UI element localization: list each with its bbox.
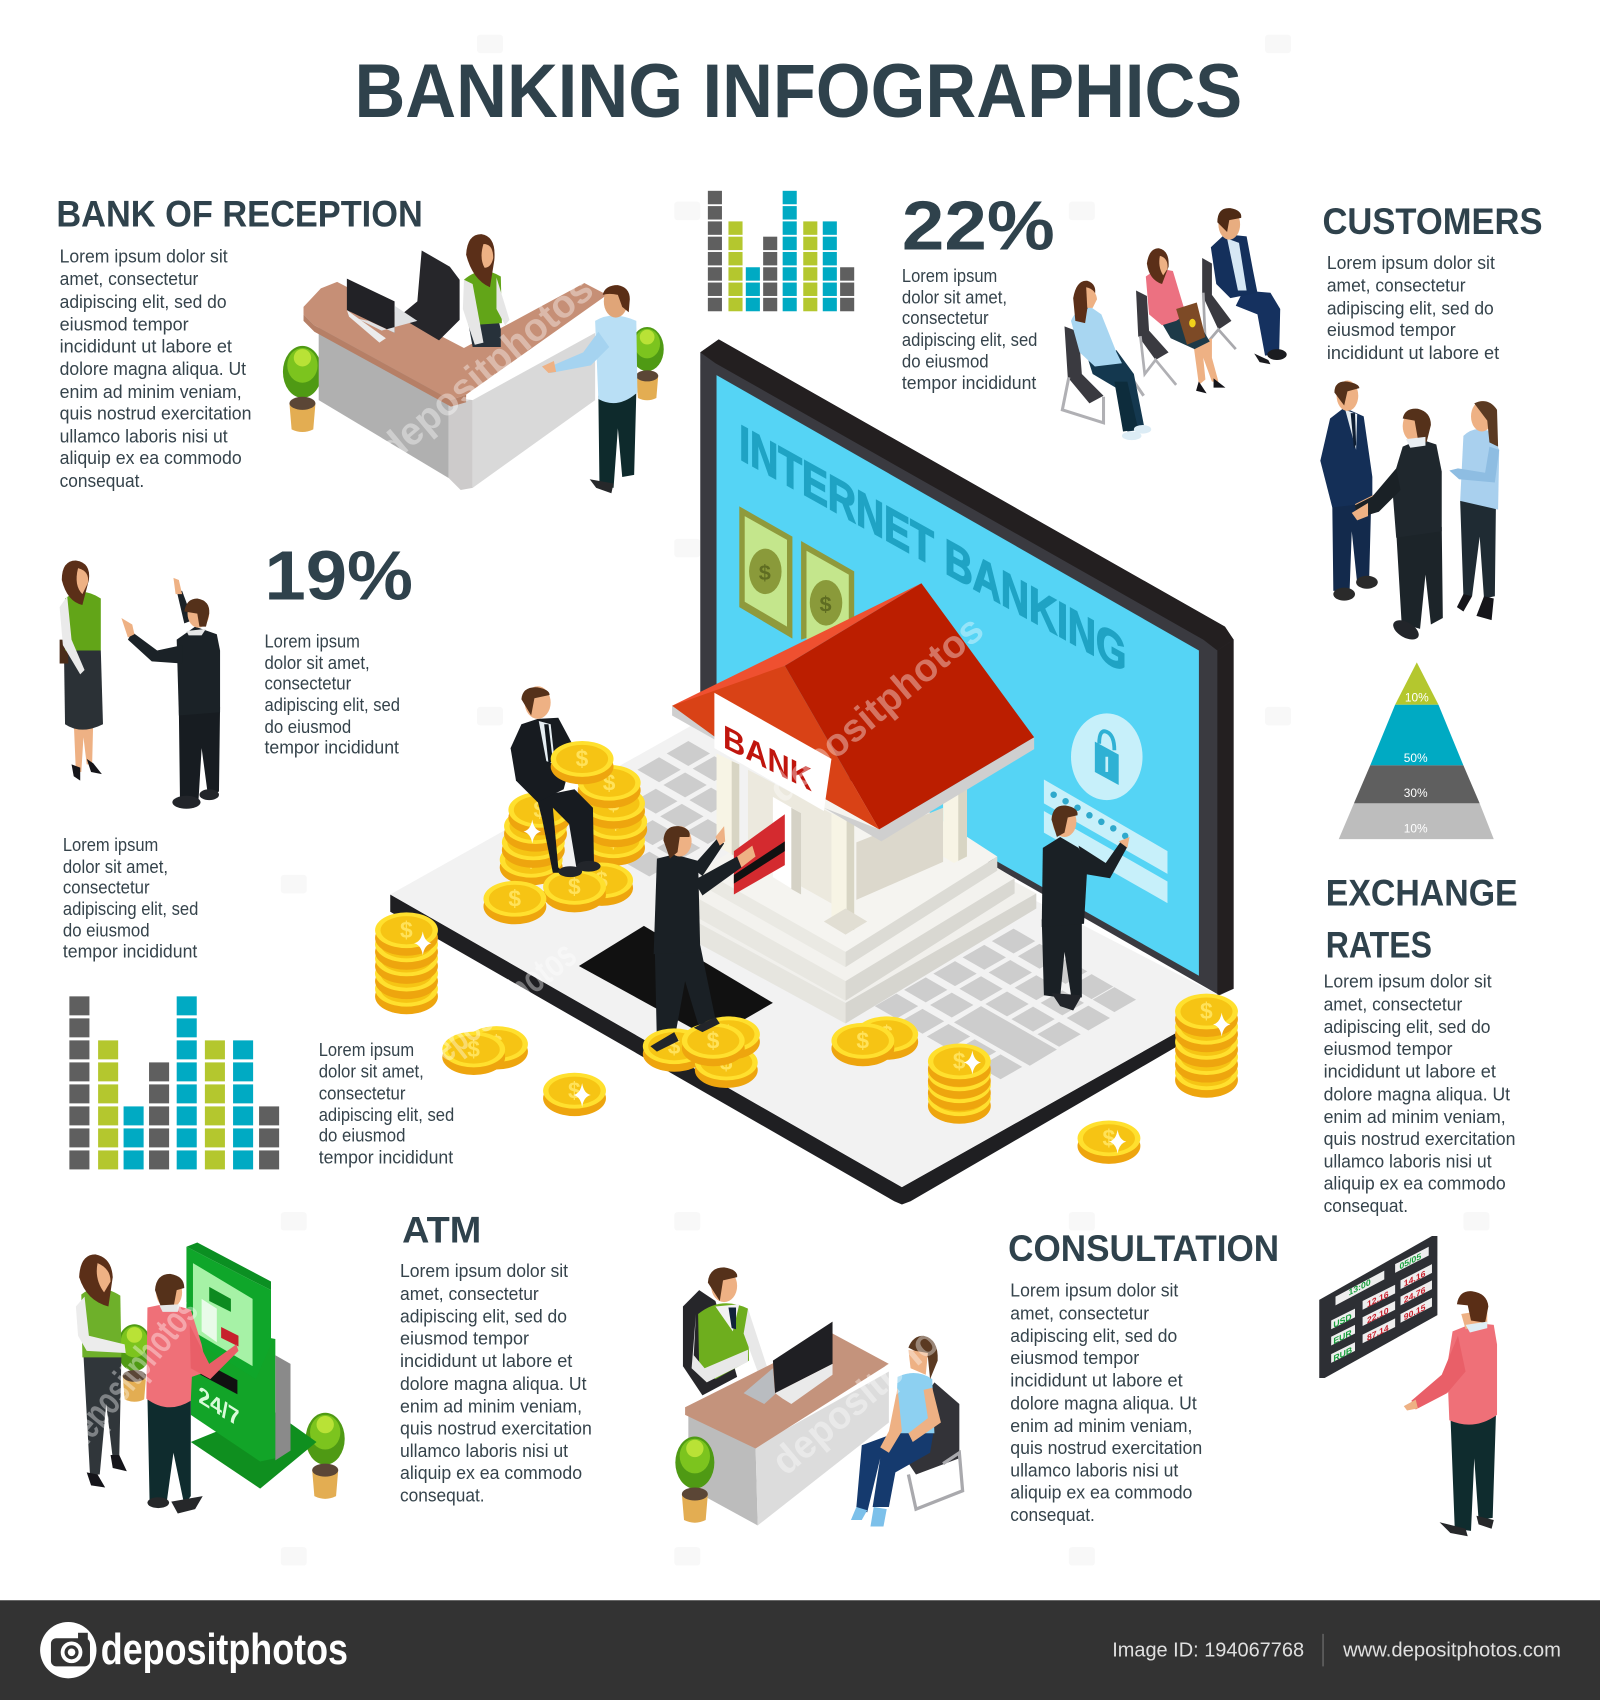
text block: consultation: Lorem ipsum dolor sit [1010, 1280, 1178, 1301]
woman clerk [60, 561, 103, 781]
text block: 22 percent: Lorem ipsum [902, 265, 997, 286]
pyramid labels: 30% [1404, 786, 1428, 800]
man at screen [1042, 805, 1130, 1010]
text block: consultation: ullamco laboris nisi ut [1010, 1460, 1178, 1481]
board cells and labels: 87.14 [1367, 1322, 1389, 1343]
banknote: $ [820, 591, 832, 616]
panel: customers [1322, 201, 1543, 363]
segment 10 percent bottom [1339, 803, 1494, 839]
exchange board [1319, 1236, 1437, 1378]
icon: consultation plant [675, 1437, 714, 1523]
text block: reception: adipiscing elit, sed do [60, 291, 227, 312]
seated man [1202, 208, 1287, 364]
text block: consultation [1010, 1280, 1202, 1525]
text block: ATM: dolore magna aliqua. Ut [400, 1373, 586, 1394]
desk monitor [773, 1322, 833, 1393]
text block: customers: incididunt ut labore et [1327, 342, 1499, 363]
heading: rates: RATES [1326, 924, 1432, 965]
icon: left plant [283, 346, 322, 432]
segment 50 percent [1370, 705, 1463, 765]
coin: single [543, 1073, 606, 1116]
logo wordmark: depositphotos [101, 1626, 348, 1674]
heading: ATM: ATM [402, 1209, 481, 1250]
text block: bottom left chart: consectetur [319, 1082, 405, 1103]
text block: 19 percent [264, 630, 400, 758]
panel: bank of reception [56, 194, 664, 493]
man in black gesturing [121, 578, 220, 809]
pyramid labels [1404, 690, 1429, 836]
text block: 19 percent: tempor incididunt [264, 737, 399, 758]
text block: exchange rates: quis nostrud exercitation [1324, 1128, 1515, 1149]
pyramid labels: 10% [1404, 822, 1428, 836]
ATM machine [186, 1242, 317, 1489]
handshake group [1320, 381, 1499, 644]
text block: 22 percent [902, 265, 1037, 393]
heading: consultation: CONSULTATION [1008, 1228, 1279, 1269]
text block: bottom left chart: adipiscing elit, sed [319, 1104, 454, 1125]
walls [856, 808, 943, 900]
logo icon [40, 1622, 96, 1678]
text block: ATM: aliquip ex ea commodo [400, 1462, 582, 1483]
text block: reception: ullamco laboris nisi ut [60, 425, 228, 446]
receptionist woman [463, 234, 509, 347]
text block: reception: dolore magna aliqua. Ut [60, 358, 246, 379]
heading: bank of reception: BANK OF RECEPTION [56, 194, 423, 235]
watermarks: depositphotos [764, 1283, 991, 1484]
text block: left middle: Lorem ipsum [63, 834, 158, 855]
reception desk [304, 234, 607, 490]
label: 24/7: 24/7 [198, 1380, 240, 1433]
text block: bottom left chart: do eiusmod [319, 1125, 405, 1146]
stat: 22 percent [902, 186, 1055, 393]
text block: ATM [400, 1260, 592, 1506]
text block: bottom left chart [319, 1039, 454, 1167]
text block: reception: quis nostrud exercitation [60, 403, 251, 424]
board cells and labels: 05/05 [1399, 1251, 1421, 1271]
door [773, 797, 801, 894]
icon: ATM plant front [306, 1413, 345, 1499]
keyboard: left section [628, 741, 736, 877]
text block: 22 percent: consectetur [902, 307, 989, 328]
text block: customers: amet, consectetur [1327, 275, 1466, 296]
watermarks [55, 267, 992, 1484]
steps [672, 772, 1036, 1023]
panel: exchange rates [1319, 872, 1518, 1536]
coins: loose pair [442, 1026, 528, 1075]
seated woman with bag [1136, 248, 1224, 392]
number: 19%: 19% [264, 537, 413, 615]
board cells and labels: USD [1333, 1311, 1352, 1330]
seated woman in blue [1062, 281, 1151, 440]
text block: consultation: consequat. [1010, 1504, 1095, 1525]
coin: single right [1078, 1121, 1140, 1164]
text block: ATM: Lorem ipsum dolor sit [400, 1260, 568, 1281]
text block: left middle [63, 834, 198, 961]
coin stack: right [1175, 994, 1238, 1098]
text block: left middle: dolor sit amet, [63, 856, 168, 877]
bank sign: BANK [723, 719, 812, 799]
icon: right plant [631, 327, 664, 400]
pyramid chart [1339, 662, 1494, 839]
segment 30 percent [1354, 765, 1480, 803]
board cells and labels: EUR [1333, 1328, 1352, 1346]
panel: consultation [675, 1228, 1279, 1527]
text block: consultation: dolore magna aliqua. Ut [1010, 1392, 1197, 1413]
watermarks: depositphotos [761, 608, 992, 811]
text block: left middle: tempor incididunt [63, 940, 197, 961]
text block: 19 percent: adipiscing elit, sed [264, 694, 400, 715]
text block: bottom left chart: dolor sit amet, [319, 1061, 424, 1082]
text block: reception: enim ad minim veniam, [60, 381, 242, 402]
board cells and labels [1331, 1247, 1432, 1364]
panel: ATM [76, 1209, 592, 1514]
text block: exchange rates: ullamco laboris nisi ut [1324, 1151, 1492, 1172]
trackpad hole [579, 926, 773, 1039]
coins: seated man stacks [483, 765, 647, 924]
ATM woman [76, 1254, 127, 1488]
text block: ATM: adipiscing elit, sed do [400, 1306, 567, 1327]
board cells and labels: 12.16 [1367, 1289, 1389, 1309]
ATM man in pink [146, 1274, 238, 1514]
title: BANKING INFOGRAPHICS [354, 49, 1242, 134]
columns [717, 754, 967, 935]
keyboard: right section [875, 929, 1136, 1079]
bank building [672, 583, 1036, 1023]
board cells and labels: 14.16 [1404, 1269, 1425, 1289]
woman in blue top [1449, 401, 1499, 620]
text block: reception [60, 245, 251, 491]
text block: exchange rates: adipiscing elit, sed do [1324, 1016, 1491, 1037]
board cells and labels: 22.10 [1367, 1305, 1389, 1326]
icon: ATM plant back [117, 1324, 152, 1402]
text block: ATM: enim ad minim veniam, [400, 1396, 582, 1417]
text block: ATM: consequat. [400, 1485, 485, 1506]
coins: pair [831, 1016, 918, 1066]
coin held by seated man [551, 741, 614, 784]
text block: left middle: do eiusmod [63, 920, 150, 941]
background camera marks [281, 35, 1489, 1566]
banknote: $ [759, 560, 771, 585]
text block: 19 percent: consectetur [264, 673, 351, 694]
text block: left middle: consectetur [63, 876, 150, 897]
coin stack: left [375, 912, 438, 1014]
black suit man [1352, 409, 1443, 644]
banknote [739, 506, 792, 639]
pyramid labels: 10% [1405, 690, 1429, 704]
text block: consultation: eiusmod tempor [1010, 1347, 1139, 1368]
text block: bottom left chart: Lorem ipsum [319, 1039, 414, 1060]
stat: 19 percent [264, 537, 413, 758]
text block: 22 percent: do eiusmod [902, 351, 989, 372]
segment 10 percent top [1395, 662, 1438, 705]
text block: exchange rates: Lorem ipsum dolor sit [1324, 971, 1492, 992]
footer bar [0, 1600, 1600, 1700]
shoes of man with card [650, 1017, 720, 1052]
icon: lock [1071, 713, 1143, 800]
monitor [347, 279, 395, 333]
board cells and labels: 24.76 [1404, 1285, 1425, 1305]
text block: reception: Lorem ipsum dolor sit [60, 245, 228, 266]
heading: customers: CUSTOMERS [1322, 201, 1543, 242]
text block: exchange rates: consequat. [1324, 1195, 1408, 1216]
consultant with chair [683, 1267, 767, 1395]
screen title: INTERNET BANKING [739, 415, 1126, 685]
text block: consultation: quis nostrud exercitation [1010, 1437, 1202, 1458]
pyramid labels: 50% [1404, 751, 1428, 765]
man with credit card [654, 814, 785, 1043]
watermarks: depositphotos [371, 267, 602, 471]
text block: ATM: incididunt ut labore et [400, 1350, 572, 1371]
banknote [801, 541, 854, 640]
number: 22%: 22% [902, 186, 1055, 264]
heading: exchange: EXCHANGE [1326, 872, 1518, 913]
password fields [1044, 780, 1167, 903]
text block: customers: adipiscing elit, sed do [1327, 297, 1494, 318]
text block: exchange rates: enim ad minim veniam, [1324, 1106, 1506, 1127]
text block: customers: eiusmod tempor [1327, 319, 1456, 340]
desk keyboard [744, 1368, 775, 1404]
board cells and labels: 90.15 [1404, 1302, 1425, 1322]
website: www.depositphotos.com [1342, 1639, 1561, 1662]
text block: 22 percent: dolor sit amet, [902, 287, 1007, 308]
coins: under man with card [643, 1016, 760, 1088]
text block: exchange rates: eiusmod tempor [1324, 1038, 1453, 1059]
reception customer man [542, 285, 637, 493]
text block: exchange rates: incididunt ut labore et [1324, 1061, 1496, 1082]
text block: reception: incididunt ut labore et [60, 335, 232, 356]
watermarks: depositphotos [413, 933, 584, 1080]
text block: consultation: enim ad minim veniam, [1010, 1415, 1192, 1436]
man in pink looking at board [1404, 1291, 1497, 1536]
consultation desk [685, 1322, 889, 1525]
bar chart: top [708, 191, 854, 311]
coin stack: middle [928, 1044, 991, 1124]
central laptop illustration [375, 339, 1238, 1205]
board cells and labels: 13:00 [1349, 1277, 1371, 1297]
text block: left middle: adipiscing elit, sed [63, 898, 198, 919]
text block: ATM: quis nostrud exercitation [400, 1417, 592, 1438]
bank sign [714, 693, 831, 811]
text block: consultation: incididunt ut labore et [1010, 1370, 1183, 1391]
seated customers [1062, 208, 1287, 440]
text block: ATM: eiusmod tempor [400, 1327, 529, 1348]
text block: reception: consequat. [60, 470, 144, 491]
text block: consultation: aliquip ex ea commodo [1010, 1481, 1192, 1502]
receptionist chair [399, 250, 460, 340]
text block: consultation: amet, consectetur [1010, 1302, 1149, 1323]
text block: 22 percent: adipiscing elit, sed [902, 329, 1037, 350]
text block: 19 percent: Lorem ipsum [264, 630, 360, 651]
text block: 22 percent: tempor incididunt [902, 372, 1036, 393]
navy suit man [1320, 381, 1378, 601]
text block: 19 percent: do eiusmod [264, 716, 351, 737]
watermarks: depositphotos [55, 1290, 207, 1459]
text block: reception: aliquip ex ea commodo [60, 447, 242, 468]
text block: reception: amet, consectetur [60, 268, 198, 289]
man sitting on coins [511, 686, 601, 877]
text block: customers: Lorem ipsum dolor sit [1327, 252, 1495, 273]
text block: customers [1327, 252, 1499, 363]
bar chart: bottom [69, 996, 279, 1169]
board cells and labels: RUB [1333, 1345, 1352, 1364]
text block: ATM: ullamco laboris nisi ut [400, 1440, 568, 1461]
red roof [672, 583, 1034, 841]
text block: reception: eiusmod tempor [60, 314, 189, 335]
text block: bottom left chart: tempor incididunt [319, 1146, 453, 1167]
text block: 19 percent: dolor sit amet, [264, 652, 370, 673]
text block: consultation: adipiscing elit, sed do [1010, 1325, 1177, 1346]
text block: exchange rates [1324, 971, 1515, 1216]
laptop base [390, 724, 1231, 1205]
customer woman seated [851, 1336, 963, 1527]
laptop screen [700, 339, 1234, 995]
text block: exchange rates: aliquip ex ea commodo [1324, 1172, 1506, 1193]
text block: exchange rates: amet, consectetur [1324, 993, 1462, 1014]
credit card [734, 814, 785, 894]
image id: Image ID: 194067768 [1112, 1639, 1304, 1662]
text block: exchange rates: dolore magna aliqua. Ut [1324, 1083, 1510, 1104]
text block: ATM: amet, consectetur [400, 1283, 539, 1304]
